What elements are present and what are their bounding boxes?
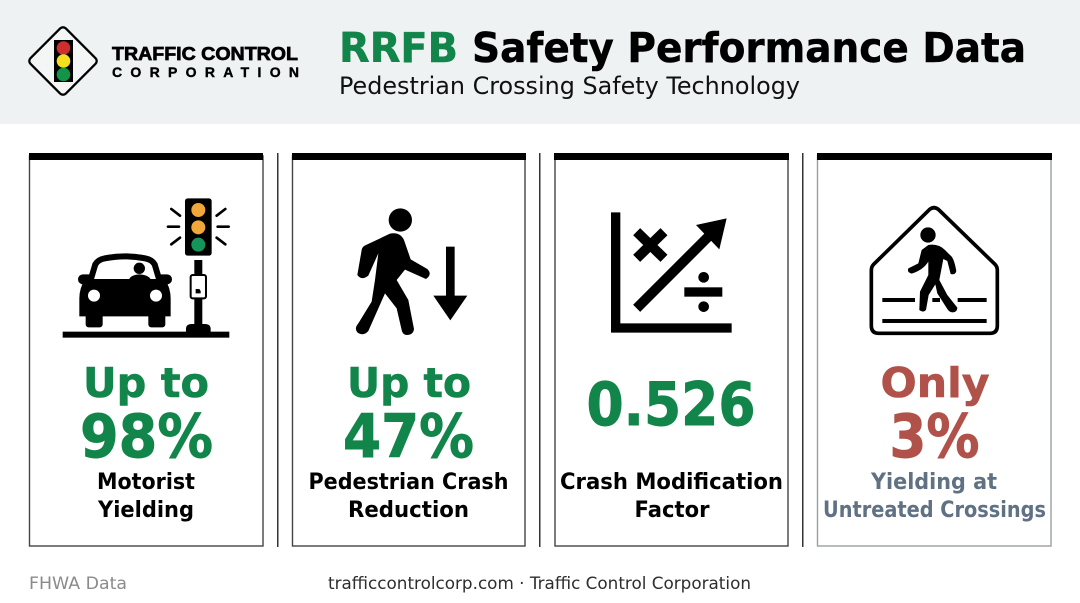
panel: untreated crossings <box>817 153 1052 546</box>
stat <box>80 359 213 472</box>
logo <box>28 26 299 96</box>
label: Crash Modification <box>560 470 783 495</box>
label: Pedestrian Crash <box>308 470 508 495</box>
stat: Up to <box>347 359 471 407</box>
icon: car and flashing beacon <box>63 198 229 338</box>
footer source note: FHWA Data <box>29 574 127 593</box>
stat: 0.526 <box>586 370 756 440</box>
label <box>97 470 195 523</box>
icon: chart with math symbols <box>611 212 732 333</box>
panel: motorist yielding <box>29 153 263 546</box>
panel: pedestrian crash reduction <box>292 153 526 546</box>
stat <box>880 359 990 472</box>
stat: 3% <box>890 402 980 472</box>
panel: crash modification factor <box>554 153 789 546</box>
stat <box>343 359 474 472</box>
logo wordmark <box>112 44 299 80</box>
footer website credit: trafficcontrolcorp.com · Traffic Control Corporation <box>328 574 751 593</box>
label: Reduction <box>348 498 469 523</box>
label: Factor <box>634 498 710 523</box>
logo wordmark: CORPORATION <box>112 64 299 80</box>
logo wordmark: TRAFFIC CONTROL <box>112 44 298 64</box>
label <box>308 470 508 523</box>
title: Safety Performance Data <box>472 24 1026 72</box>
subtitle: Pedestrian Crossing Safety Technology <box>339 72 800 100</box>
icon: pedestrian with down arrow <box>356 208 467 335</box>
logo diamond with traffic light <box>28 26 98 96</box>
stat: Up to <box>83 359 209 407</box>
stat: 47% <box>343 402 474 472</box>
label: Yielding <box>97 498 194 523</box>
label: Yielding at <box>870 470 997 495</box>
label <box>560 470 783 523</box>
label <box>823 470 1046 523</box>
stat: 98% <box>80 402 213 472</box>
title: RRFB <box>339 24 458 72</box>
icon: pedestrian crossing sign <box>871 208 997 333</box>
column separators <box>277 153 804 547</box>
label: Untreated Crossings <box>823 498 1046 523</box>
stat: Only <box>880 359 990 407</box>
header band <box>0 0 1080 124</box>
label: Motorist <box>97 470 195 495</box>
